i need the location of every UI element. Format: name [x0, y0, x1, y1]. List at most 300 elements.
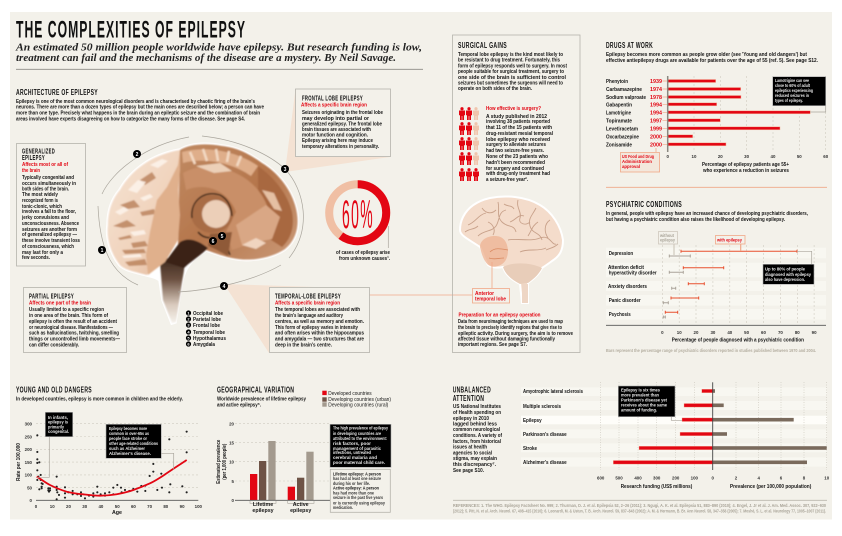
bar chart: prevalence: Lifetime — [253, 502, 273, 508]
bar chart: drug efficacy: 40 — [771, 154, 776, 159]
callout: infants: congenital. — [48, 429, 69, 434]
section: unbalanced attention: US National Institutes — [453, 404, 501, 410]
callout: developing countries: infections, untreated — [333, 450, 371, 455]
scatter chart: incidence by age: 200 — [25, 447, 33, 452]
legend tag: without epilepsy: without — [659, 233, 674, 238]
range chart: psychiatric disorders: 70 — [778, 330, 783, 335]
diverging bar chart: funding vs prevalence: 6 — [780, 476, 783, 480]
bar chart: prevalence: epilepsy — [252, 508, 274, 514]
section: psychiatric conditions: PSYCHIATRIC CONDITIONS — [606, 200, 682, 209]
donut chart: 60% — [329, 184, 390, 262]
panel: partial epilepsy: can differ considerably. — [29, 342, 79, 348]
callout: epilepsy funding: receives about the same — [621, 402, 667, 408]
highlighted anterior temporal lobe — [480, 236, 508, 267]
callout: epilepsy funding: more prevalent than — [621, 392, 659, 398]
section: unbalanced attention — [453, 382, 830, 490]
callout: depression: also have depression. — [765, 277, 805, 282]
panel: generalized epilepsy: unconsciousness. Absence — [22, 221, 79, 227]
bar chart: drug efficacy: Percentage of epilepsy patients age 55+ — [702, 162, 789, 168]
panel: generalized epilepsy: these involve transient loss — [22, 238, 80, 244]
panel: surgical gains: that 11 of the 15 patients with — [486, 125, 552, 131]
range chart: psychiatric disorders: 10 — [677, 330, 682, 335]
callout: developing countries: cerebral malaria and — [333, 455, 377, 460]
legend: country groups: Developing countries (urban) — [328, 397, 391, 403]
bar chart: drug efficacy: 60 — [823, 154, 829, 159]
bar chart: drug efficacy: 2000 — [650, 134, 662, 140]
section: psychiatric conditions — [606, 200, 826, 353]
scatter chart: incidence by age: 100 — [25, 473, 33, 478]
scatter chart: incidence by age: 250 — [25, 434, 33, 439]
bar chart: drug efficacy: Phenytoin — [606, 79, 628, 85]
panel: generalized epilepsy: the brain — [22, 168, 40, 174]
diverging bar chart: funding vs prevalence: 10 — [824, 476, 830, 480]
callout: developing countries — [330, 424, 391, 467]
panel: temporal-lobe epilepsy: the brain's language and auditory — [275, 313, 343, 319]
section: unbalanced attention: lagged behind less — [453, 422, 497, 428]
diverging bar chart: funding vs prevalence: Prevalence (per 100,000 population) — [730, 484, 811, 490]
panel: generalized epilepsy: GENERALIZED — [22, 148, 55, 156]
bar chart: drug efficacy: 2000 — [650, 142, 662, 148]
panel: surgical gains: A study published in 2012 — [486, 114, 547, 120]
diverging bar chart: funding vs prevalence: 200 — [672, 476, 680, 480]
panel: surgical gains: Preparation for an epilepsy operation — [458, 312, 540, 318]
diverging bar chart: funding vs prevalence: 2 — [735, 476, 738, 480]
range chart: psychiatric disorders: 20 — [694, 330, 699, 335]
bar chart: drug efficacy: Topiramate — [606, 118, 632, 124]
number markers on brain: 1 — [101, 248, 104, 254]
callout: developing countries: attributed to the environment: — [333, 436, 387, 441]
callout: depression: diagnosed with epilepsy — [765, 272, 811, 277]
callout: FDA approval: approval — [622, 164, 640, 169]
legend tag: without epilepsy — [658, 232, 678, 255]
panel: partial epilepsy: things or uncontrolled limb movements— — [29, 336, 121, 342]
number markers on brain: 2 — [136, 152, 139, 158]
panel: temporal-lobe epilepsy: and often arises within the hippocampus — [275, 330, 364, 336]
donut chart: 60%: of cases of epilepsy arise — [336, 250, 390, 256]
panel: temporal-lobe epilepsy: TEMPORAL-LOBE EPILEPSY — [275, 294, 341, 300]
section: young and old dangers — [16, 386, 203, 516]
panel: surgical gains: with drug-only treatment had — [485, 171, 550, 177]
section: unbalanced attention: of Health spending on — [453, 410, 501, 416]
definitions box: has had more than one — [333, 490, 374, 496]
callout: lamotrigine: Lamotrigine can see — [775, 78, 809, 83]
panel: frontal lobe epilepsy: temporary alterations in personality. — [302, 144, 379, 150]
brain illustration: medial view — [108, 144, 298, 323]
range chart: psychiatric disorders: 60 — [761, 330, 766, 335]
panel: partial epilepsy: such as hallucinations, twitching, smelling — [29, 330, 119, 336]
range chart: psychiatric disorders: 50 — [744, 330, 750, 335]
bar chart: drug efficacy: Lamotrigine — [606, 110, 631, 116]
title: THE COMPLEXITIES OF EPILEPSY — [16, 16, 246, 44]
bar chart: drug efficacy: 20 — [718, 154, 723, 159]
section: unbalanced attention: UNBALANCED — [453, 386, 491, 394]
callout: lamotrigine: close to 60% of adult — [775, 83, 810, 88]
bar chart: prevalence: epilepsy — [290, 508, 311, 514]
callout: FDA approval — [620, 148, 660, 172]
diverging bar chart: funding vs prevalence: Parkinson's disease — [523, 432, 567, 438]
legend tag: with epilepsy: with epilepsy — [716, 238, 742, 242]
panel: generalized epilepsy: few seconds. — [22, 255, 50, 261]
callout: FDA approval: Administration — [622, 159, 652, 164]
legend: country groups — [322, 391, 391, 408]
references — [453, 500, 827, 514]
section: unbalanced attention: conditions. A variety of — [453, 433, 502, 439]
bar chart: prevalence: 10 — [229, 460, 235, 464]
panel: temporal-lobe epilepsy: centres, as well as memory and emotion. — [275, 319, 364, 325]
number markers on brain — [98, 150, 289, 290]
callout: developing countries: in developing countries are — [333, 431, 381, 436]
panel: temporal-lobe epilepsy: and amygdala — two structures that are — [275, 336, 364, 342]
range chart: psychiatric disorders: 80 — [795, 330, 800, 335]
wedge to frontal box — [285, 89, 390, 172]
scatter chart: incidence by age: 150 — [25, 460, 33, 465]
panel: frontal lobe epilepsy: FRONTAL LOBE EPILEPSY — [302, 96, 363, 102]
range chart: psychiatric disorders: hyperactivity disorder — [609, 270, 657, 276]
section: unbalanced attention: factors, from historical — [453, 439, 501, 445]
range chart: psychiatric disorders: Psychosis — [609, 312, 631, 318]
section: drugs at work: DRUGS AT WORK — [606, 41, 653, 50]
panel: generalized epilepsy: may last for only a — [22, 250, 63, 256]
definitions box — [330, 469, 390, 512]
callout: FDA approval: US Food and Drug — [622, 154, 654, 159]
panel: frontal lobe epilepsy: generalized epilepsy. The frontal lobe — [302, 122, 382, 128]
bar chart: prevalence: 0 — [232, 498, 235, 503]
thalamus and deep structures — [191, 195, 233, 233]
callout: epilepsy funding: Epilepsy is six times — [621, 388, 660, 392]
range chart: psychiatric disorders: Depression — [609, 251, 633, 257]
legend tag: without epilepsy: epilepsy — [660, 238, 675, 242]
illustration: side view of brain — [460, 196, 563, 303]
section: young and old dangers: In developed countries, epilepsy is more common in children and the elderly. — [16, 396, 183, 402]
legend tag: with epilepsy — [716, 236, 745, 251]
bar chart: drug efficacy: 0 — [666, 154, 669, 159]
callout: lamotrigine: reduced seizures in — [775, 93, 809, 98]
panel: surgical gains: epileptic activity. During surgery, the aim is to remove — [458, 331, 573, 337]
section: psychiatric conditions: but having a psychiatric condition also raises the likelihood of developing epilepsy. — [606, 217, 785, 223]
number markers on brain: 3 — [284, 167, 287, 173]
section: architecture of epilepsy: Epilepsy is one of the most common neurological disorders and is characterised by chaotic firing of the brain's — [16, 99, 255, 105]
panel: generalized epilepsy: tonic-clonic, which — [22, 204, 62, 210]
bar chart: prevalence: Active — [293, 502, 309, 508]
callout: elderly: people face stroke or — [109, 436, 147, 441]
section: geographical variation — [216, 386, 391, 514]
panel: partial epilepsy: Usually limited to a specific region — [29, 307, 104, 313]
legend: brain regions: Amygdala — [193, 342, 215, 348]
diverging bar chart: funding vs prevalence: Alzheimer's disease — [523, 460, 567, 466]
legend: brain regions: 4 — [187, 329, 190, 334]
outer cortex — [108, 150, 180, 275]
cut face — [146, 150, 180, 275]
subtitle: An estimated 50 million people worldwide have epilepsy. But research funding is low, — [15, 42, 422, 54]
bar chart: drug efficacy: 1994 — [650, 102, 662, 108]
diverging bar chart: funding vs prevalence: 4 — [757, 476, 760, 480]
section: geographical variation: and active epilepsy⁶. — [217, 402, 261, 408]
legend: country groups: Developing countries (rural) — [328, 402, 389, 408]
panel: frontal lobe epilepsy: Epilepsy arising here may induce — [302, 138, 373, 144]
section: unbalanced attention: See page S10. — [453, 468, 484, 474]
legend: brain regions: 3 — [187, 322, 190, 327]
bar chart: prevalence — [216, 422, 330, 514]
panel: frontal lobe epilepsy: may develop into partial or — [302, 116, 369, 122]
definitions box: Active epilepsy: A person — [333, 486, 379, 490]
range chart: psychiatric disorders: 90 — [812, 330, 817, 335]
scatter chart: incidence by age: Rate per 100,000 — [16, 443, 22, 481]
panel: temporal-lobe epilepsy: Affects a specific brain region — [275, 300, 340, 306]
panel: temporal-lobe epilepsy: The temporal lobes are associated with — [275, 307, 360, 313]
panel: surgical gains: Data from neuroimaging techniques are used to map — [458, 319, 564, 325]
medial surface — [178, 144, 298, 260]
section: architecture of epilepsy — [16, 88, 264, 122]
range chart: psychiatric disorders: Percentage of people diagnosed with a psychiatric condition — [672, 338, 804, 344]
scatter chart: incidence by age: 300 — [25, 422, 33, 426]
panel: generalized epilepsy: involves a fall to the floor, — [22, 209, 76, 215]
scatter chart: incidence by age: 40 — [98, 504, 104, 509]
panel: surgical gains: drug-resistant mesial temporal — [486, 131, 553, 137]
bar chart: drug efficacy: 1939 — [650, 79, 662, 85]
section: architecture of epilepsy: neurons. There are more than a dozen types of epilepsy but the main ones are described below; a person can have — [16, 104, 264, 110]
panel: surgical gains: surgery to alleviate seizures — [486, 142, 546, 148]
legend: brain regions: Parietal lobe — [193, 317, 221, 323]
diverging bar chart: funding vs prevalence: 400 — [634, 476, 642, 480]
number markers on brain: 5 — [221, 234, 224, 240]
section: drugs at work: effective antiepilepsy drugs are available for patients over the age of 55 (ref. 5). See page S12. — [606, 58, 818, 64]
scatter chart: incidence by age: 80 — [163, 504, 169, 509]
callout: developing countries: management of parasitic — [333, 446, 381, 451]
panel: surgical gains: SURGICAL GAINS — [458, 41, 507, 50]
bar chart: prevalence: Estimated prevalence — [216, 440, 222, 484]
panel: surgical gains: involving 38 patients reported — [486, 119, 550, 125]
panel: surgical gains: Temporal lobe epilepsy is the kind most likely to — [458, 52, 564, 58]
wedge to temporal box — [224, 284, 315, 353]
callout: elderly: Alzheimer's disease. — [109, 451, 151, 456]
panel: generalized epilepsy: jerky convulsions and — [21, 215, 69, 221]
scatter chart: incidence by age: 10 — [50, 504, 55, 509]
callout: infants — [37, 412, 73, 477]
section: drugs at work — [606, 41, 829, 174]
bar chart: drug efficacy: 1999 — [650, 126, 662, 132]
panel: surgical gains: affected tissue without damaging functionally — [458, 336, 555, 342]
range chart: psychiatric disorders: 40 — [727, 330, 733, 335]
bar chart: prevalence: 15 — [229, 440, 235, 446]
panel: frontal lobe epilepsy: motor function and cognition. — [302, 132, 368, 138]
panel: temporal-lobe epilepsy: deep in the brain's centre. — [275, 342, 332, 348]
diverging bar chart: funding vs prevalence — [521, 382, 830, 490]
legend: brain regions: 1 — [187, 310, 190, 315]
diverging bar chart: funding vs prevalence: Research funding (US$ millions) — [621, 484, 693, 490]
definitions box: medication. — [333, 505, 353, 510]
callout: elderly — [106, 424, 174, 470]
panel: surgical gains — [452, 35, 580, 352]
legend: brain regions: Hypothalamus — [193, 336, 226, 342]
section: unbalanced attention: ATTENTION — [453, 394, 484, 403]
panel: temporal-lobe epilepsy: This form of epilepsy varies in intensity — [275, 325, 358, 331]
panel: surgical gains: one side of the brain is sufficient to control — [458, 75, 567, 81]
bar chart: drug efficacy: who experience a reduction in seizures — [702, 168, 789, 174]
range chart: psychiatric disorders: Anxiety disorders — [608, 284, 647, 290]
scatter chart: incidence by age: 50 — [115, 504, 120, 509]
scatter chart: incidence by age: 30 — [82, 504, 88, 509]
panel: generalized epilepsy — [16, 144, 86, 266]
bar chart: drug efficacy: 10 — [692, 154, 697, 159]
callout: developing countries: risk factors, poor — [333, 441, 371, 446]
label: anterior temporal lobe: temporal lobe — [475, 296, 506, 302]
panel: partial epilepsy: epilepsy is often the result of an accident — [29, 319, 117, 325]
section: architecture of epilepsy: ARCHITECTURE OF EPILEPSY — [16, 88, 98, 97]
scatter chart: incidence by age: 50 — [27, 486, 33, 490]
section: unbalanced attention: common neurological — [453, 427, 500, 433]
section: young and old dangers: YOUNG AND OLD DANGERS — [16, 386, 92, 394]
panel: surgical gains: a seizure-free year². — [486, 177, 528, 183]
panel: surgical gains: form of epilepsy responds well to surgery. In most — [458, 64, 567, 70]
bar chart: drug efficacy: 50 — [797, 154, 802, 159]
bar chart: drug efficacy: 1978 — [650, 95, 662, 101]
panel: partial epilepsy — [24, 288, 126, 352]
callout: elderly: common in over-65s as — [109, 431, 149, 436]
panel: generalized epilepsy: seizures are another form — [22, 227, 77, 233]
diverging bar chart: funding vs prevalence: 8 — [803, 476, 806, 480]
scatter chart: incidence by age: 90 — [180, 504, 185, 509]
callout: lamotrigine: epileptics experiencing — [775, 88, 813, 93]
number markers on brain: 4 — [223, 284, 226, 290]
callout: depression: Up to 80% of people — [765, 266, 805, 272]
section: unbalanced attention: epilepsy in 2010 — [453, 416, 489, 422]
definitions box: or is currently using epilepsy — [333, 500, 385, 506]
bar chart: drug efficacy: Carbamazepine — [606, 87, 642, 93]
scatter chart: incidence by age: Age — [112, 510, 122, 516]
donut chart: 60%: from unknown causes¹. — [339, 256, 390, 262]
scatter chart: incidence by age: 0 — [35, 504, 38, 509]
bar chart: drug efficacy: 1994 — [650, 110, 662, 116]
pictogram: 11 of 15 patients — [459, 107, 479, 181]
panel: frontal lobe epilepsy: brain tissues are associated with — [302, 127, 371, 133]
panel: partial epilepsy: in one area of the brain. This form of — [29, 313, 108, 319]
donut chart: 60%: 60% — [342, 193, 374, 237]
panel: surgical gains: the brain to precisely identify regions that give rise to — [458, 325, 563, 331]
callout: elderly: Epilepsy becomes more — [109, 426, 147, 431]
panel: partial epilepsy: PARTIAL EPILEPSY — [29, 294, 74, 300]
section: geographical variation: Worldwide prevalence of lifetime epilepsy — [217, 396, 306, 402]
range chart: psychiatric disorders: Panic disorder — [609, 298, 641, 304]
scatter chart: incidence by age: 100 — [195, 504, 203, 509]
label: anterior temporal lobe — [472, 262, 510, 303]
legend: brain regions: Temporal lobe — [193, 330, 225, 336]
legend: brain regions: 6 — [187, 341, 190, 346]
bar chart: drug efficacy: Sodium valproate — [606, 95, 646, 101]
bar chart: drug efficacy: Levetiracetam — [606, 126, 638, 132]
scatter chart: incidence by age: 70 — [147, 504, 153, 509]
diverging bar chart: funding vs prevalence: 300 — [653, 476, 661, 480]
panel: temporal-lobe epilepsy — [270, 288, 472, 352]
panel: surgical gains: operate on both sides of the brain. — [458, 86, 532, 92]
callout: developing countries: The high prevalence of epilepsy — [333, 426, 388, 430]
scatter chart: incidence by age: 20 — [66, 504, 71, 509]
callout: developing countries: poor maternal child care. — [333, 460, 385, 465]
panel: partial epilepsy: or neurological disease. Manifestations — — [29, 325, 114, 331]
section: architecture of epilepsy: areas involved have experts disagreeing on how to categorize the many forms of the disease. See page S4. — [16, 116, 245, 122]
legend: brain regions — [186, 310, 226, 348]
panel: surgical gains: for surgery and continued — [486, 166, 544, 172]
panel: generalized epilepsy: recognized form is — [22, 198, 58, 204]
legend: brain regions: 5 — [187, 335, 190, 340]
bar chart: drug efficacy: 30 — [744, 154, 750, 159]
scatter chart: incidence by age — [16, 422, 203, 516]
panel: generalized epilepsy: both sides of the brain. — [22, 186, 69, 192]
callout: infants: epilepsy is — [48, 420, 68, 425]
diverging bar chart: funding vs prevalence: 0 — [711, 476, 714, 480]
definitions box: Lifetime epilepsy: A person — [333, 472, 381, 476]
section: drugs at work: Epilepsy becomes more common as people grow older (see 'Young and old dangers') but — [606, 52, 807, 58]
bar chart: drug efficacy: Zonisamide — [606, 142, 632, 148]
section: unbalanced attention: this discrepancy⁷. — [453, 462, 496, 468]
callout: epilepsy funding — [618, 386, 682, 420]
panel: partial epilepsy: Affects one part of the brain — [29, 300, 91, 306]
panel: generalized epilepsy: Typically congenital and — [22, 175, 74, 181]
callout: depression — [763, 251, 814, 284]
panel: generalized epilepsy: occurs simultaneously in — [22, 181, 76, 187]
legend: brain regions: Frontal lobe — [193, 323, 220, 329]
panel: generalized epilepsy: Affects most or all of — [22, 162, 68, 168]
section: unbalanced attention: issues at health — [453, 445, 487, 451]
definitions box: seizure in the past five years — [333, 495, 383, 500]
legend: brain regions: 2 — [187, 316, 190, 321]
definitions box: during his or her life. — [333, 481, 370, 486]
callout: elderly: other age-related conditions — [109, 441, 158, 446]
orbit arcs around brain — [98, 136, 303, 292]
diverging bar chart: funding vs prevalence: 600 — [597, 476, 605, 480]
callout: epilepsy funding: amount of funding. — [621, 408, 657, 412]
panel: surgical gains: important regions. See page S7. — [458, 342, 527, 348]
panel: surgical gains: people suitable for surgical treatment, surgery to — [458, 69, 565, 75]
section: architecture of epilepsy: more than one type. Precisely what happens in the brain during an epileptic seizure and the combination of brain — [16, 110, 260, 116]
panel: surgical gains: How effective is surgery? — [486, 106, 541, 112]
panel: surgical gains: be resistant to drug treatment. Fortunately, this — [458, 58, 560, 64]
panel: surgical gains: hadn't been recommended — [486, 160, 545, 166]
diverging bar chart: funding vs prevalence: Stroke — [523, 446, 537, 452]
section: geographical variation: GEOGRAPHICAL VARIATION — [217, 386, 294, 394]
panel: generalized epilepsy: of consciousness, which — [22, 244, 74, 250]
bar chart: drug efficacy: Gabapentin — [606, 102, 632, 108]
bar chart: drug efficacy: Oxcarbazepine — [606, 134, 639, 140]
panel: generalized epilepsy: of generalized epilepsy — — [22, 232, 78, 238]
scatter chart: incidence by age: 60 — [131, 504, 136, 509]
definitions box: has had at least one seizure — [333, 476, 381, 481]
bar chart: drug efficacy: 1997 — [650, 118, 662, 124]
section: psychiatric conditions: In general, people with epilepsy have an increased chance of developing psychiatric disorders, — [606, 211, 808, 217]
panel: frontal lobe epilepsy: Seizures originating in the frontal lobe — [302, 110, 383, 116]
bar chart: drug efficacy: 1974 — [650, 87, 662, 93]
panel: frontal lobe epilepsy: Affects a specific brain region — [301, 102, 367, 108]
panel: frontal lobe epilepsy — [296, 89, 390, 156]
range chart: psychiatric disorders: Attention deficit — [608, 265, 644, 271]
section: psychiatric conditions: Bars represent the percentage range of psychiatric disorders reported in studies published between 1970 and 2004. — [606, 348, 816, 353]
label: anterior temporal lobe: Anterior — [475, 291, 494, 297]
range chart: psychiatric disorders — [606, 245, 826, 344]
number markers on brain: 6 — [212, 239, 215, 245]
bar chart: drug efficacy — [606, 76, 829, 174]
bar chart: prevalence: 5 — [232, 479, 235, 484]
subtitle: treatment can fail and the mechanisms of the disease are a mystery. By Neil Savage. — [16, 52, 396, 64]
diverging bar chart: funding vs prevalence: 100 — [691, 476, 699, 480]
diverging bar chart: funding vs prevalence: Multiple sclerosis — [523, 404, 561, 410]
panel: generalized epilepsy: EPILEPSY — [22, 155, 45, 162]
bar chart: prevalence: (per 1,000 people) — [222, 444, 228, 480]
range chart: psychiatric disorders: 30 — [710, 330, 716, 335]
subtitle — [15, 42, 422, 64]
callout: elderly: such as Alzheimer — [109, 446, 145, 451]
callout: infants: In infants, — [48, 415, 68, 420]
bar chart: prevalence: 20 — [229, 422, 235, 426]
legend: country groups: Developed countries — [328, 391, 372, 397]
